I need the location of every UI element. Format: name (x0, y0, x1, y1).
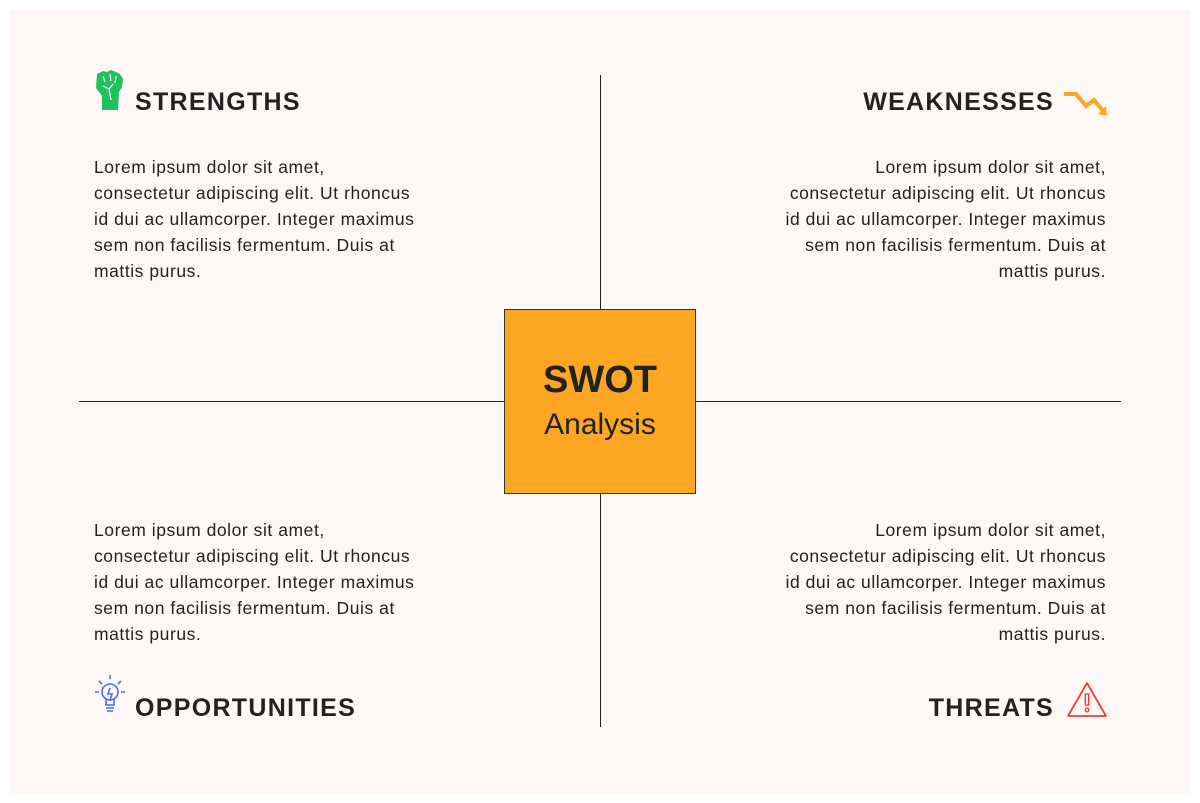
text: threats: Lorem ipsum dolor sit amet, consectetur adipiscing elit. Ut rhoncus id dui ac ullamcorper. Integer maximus sem non facilisis fermentum. Duis at mattis purus. (786, 520, 1106, 644)
heading: opportunities: OPPORTUNITIES (135, 694, 356, 722)
icon: fist (96, 70, 123, 110)
icon: warning triangle (1067, 682, 1107, 717)
heading: threats: THREATS (929, 694, 1054, 722)
icon: lightbulb (95, 675, 125, 712)
center box: SWOT Analysis: SWOT (543, 359, 657, 401)
heading: strengths: STRENGTHS (135, 88, 301, 116)
icon: down trend arrow (1064, 92, 1107, 116)
center box: SWOT Analysis: Analysis (544, 408, 656, 441)
center box: SWOT Analysis (504, 309, 696, 494)
text: strengths: Lorem ipsum dolor sit amet, consectetur adipiscing elit. Ut rhoncus id dui ac ullamcorper. Integer maximus sem non facilisis fermentum. Duis at mattis purus. (94, 157, 414, 281)
text: opportunities: Lorem ipsum dolor sit amet, consectetur adipiscing elit. Ut rhoncus id dui ac ullamcorper. Integer maximus sem non facilisis fermentum. Duis at mattis purus. (94, 520, 414, 644)
heading: weaknesses: WEAKNESSES (863, 88, 1054, 116)
text: weaknesses: Lorem ipsum dolor sit amet, consectetur adipiscing elit. Ut rhoncus id dui ac ullamcorper. Integer maximus sem non facilisis fermentum. Duis at mattis purus. (786, 157, 1106, 281)
